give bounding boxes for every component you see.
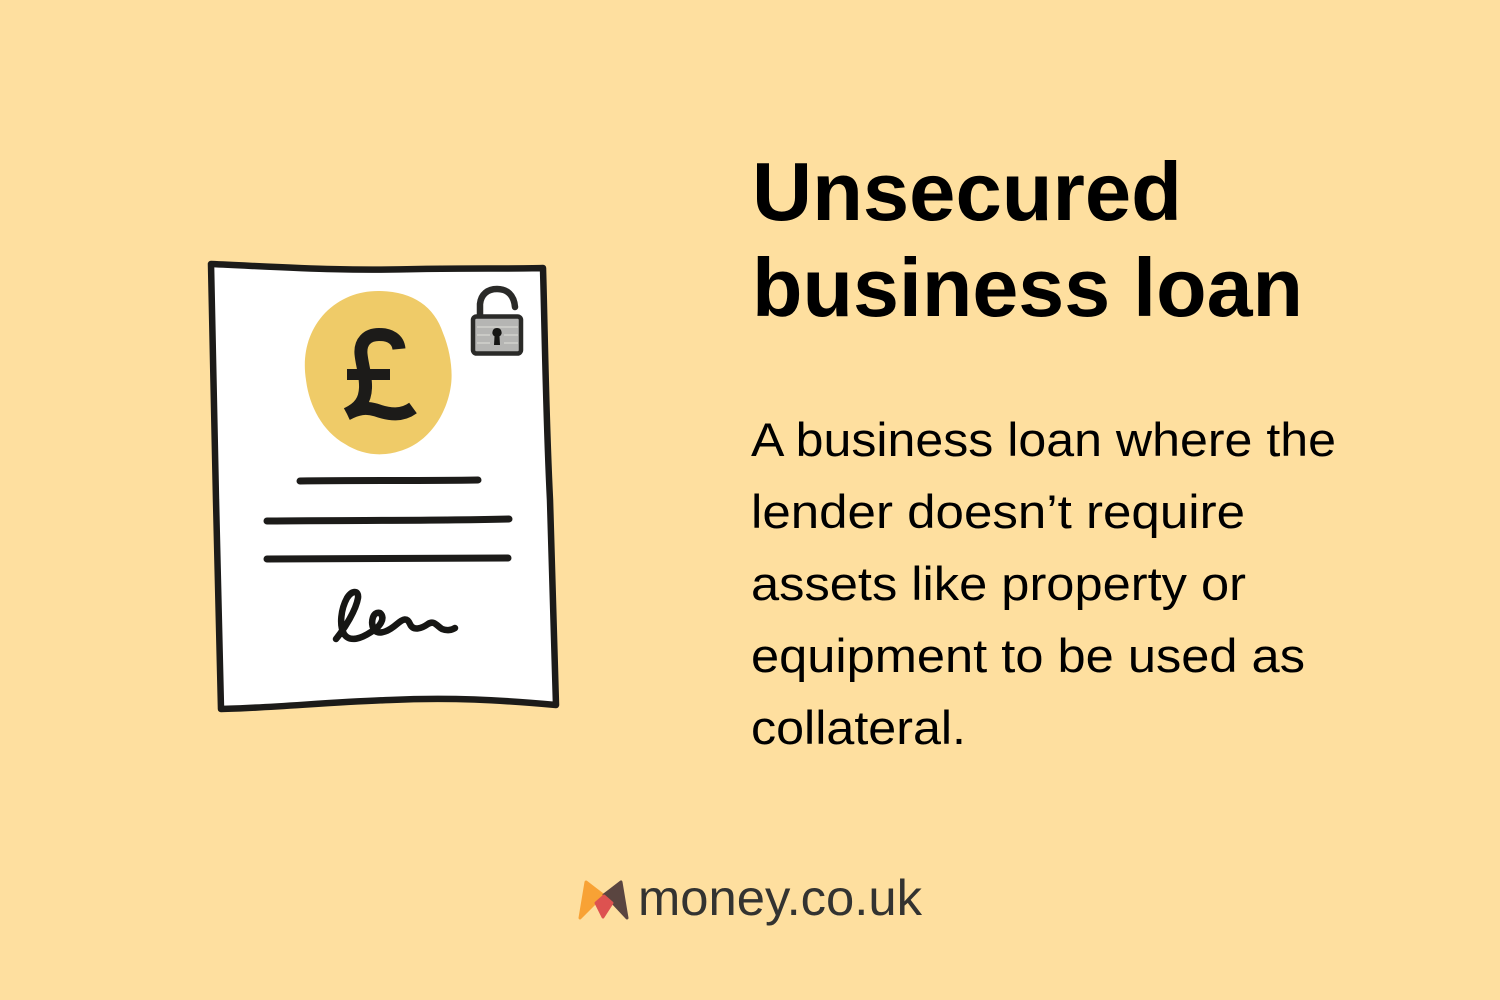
- icon: pound coin: [305, 291, 452, 454]
- padlock shackle: [480, 289, 515, 316]
- coin: [305, 291, 452, 454]
- description text: assets like property or: [751, 557, 1246, 610]
- title: business loan: [752, 241, 1303, 334]
- logo mark: [580, 882, 627, 918]
- description text: equipment to be used as: [751, 629, 1305, 682]
- title: [752, 145, 1303, 334]
- pound sign: [347, 334, 413, 414]
- text lines: [267, 480, 509, 559]
- padlock body: [473, 316, 521, 354]
- keyhole: [492, 328, 502, 345]
- illustration: loan document: [211, 264, 556, 709]
- description text: collateral.: [751, 701, 966, 754]
- description text: A business loan where the: [751, 413, 1336, 466]
- logo wordmark: money.co.uk: [638, 870, 923, 926]
- signature: [336, 592, 455, 639]
- description text: [751, 413, 1336, 754]
- padlock highlights: [477, 327, 518, 343]
- pound crossbar: [347, 369, 390, 380]
- description text: lender doesn’t require: [751, 485, 1245, 538]
- logo: money.co.uk: [580, 870, 923, 926]
- icon: open padlock: [473, 289, 521, 354]
- title: Unsecured: [752, 145, 1182, 238]
- document sheet: [211, 264, 556, 709]
